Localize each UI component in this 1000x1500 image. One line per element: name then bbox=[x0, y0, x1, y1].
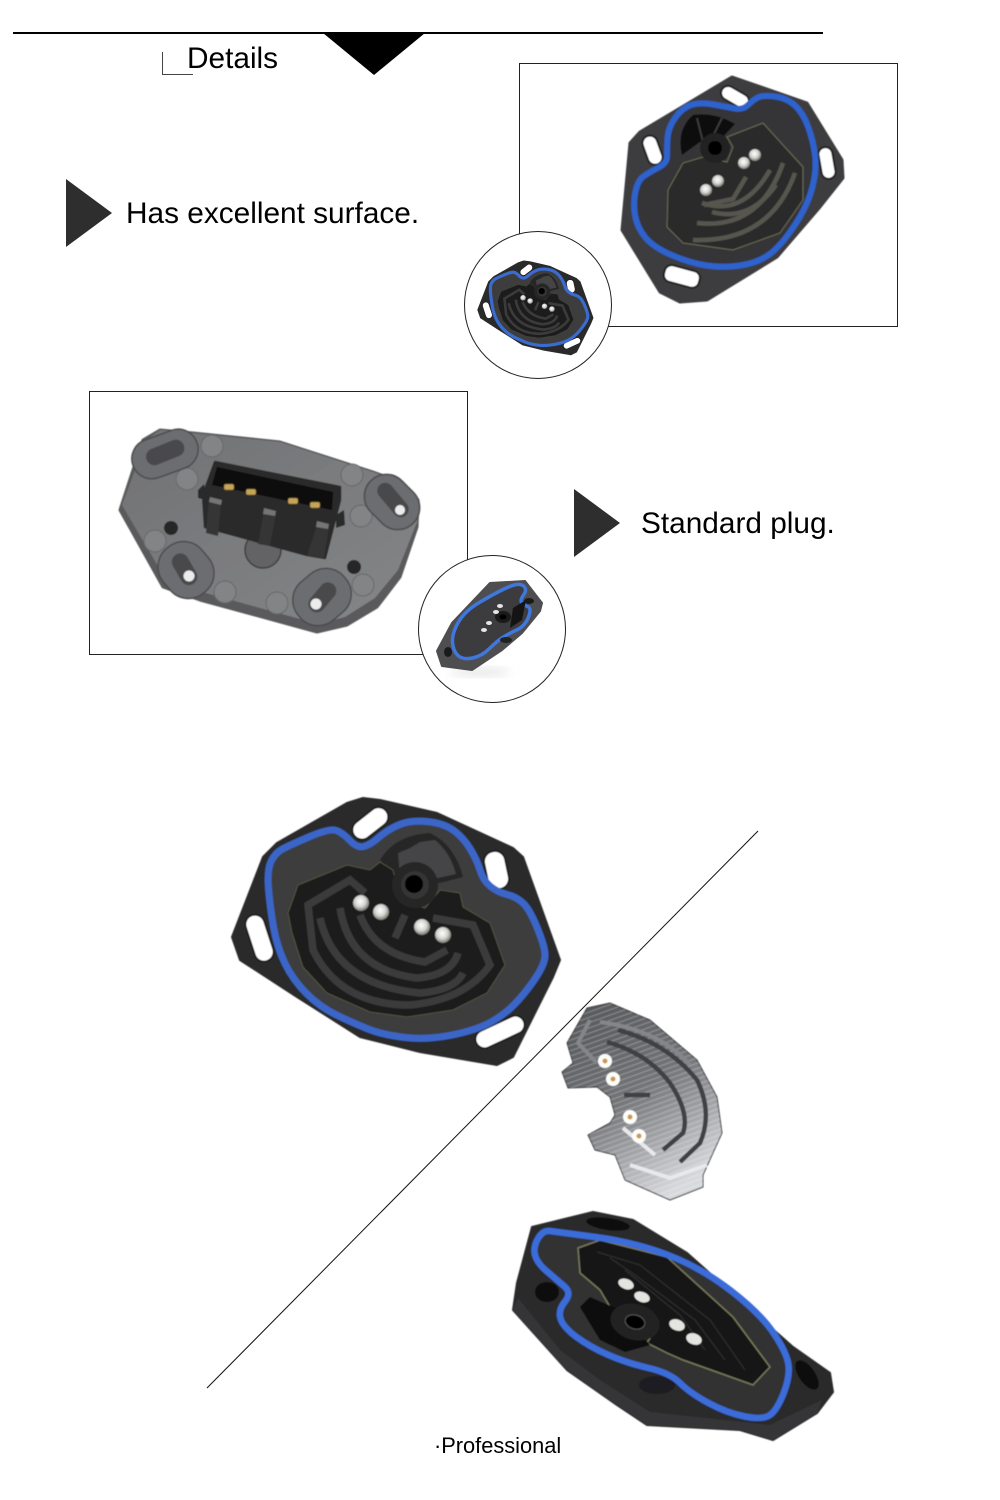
sensor photo: large face view bbox=[232, 798, 560, 1065]
inset circle: plug closeup bbox=[418, 556, 566, 702]
panel: plug photo frame bbox=[90, 392, 468, 654]
caption: Professional: ·Professional bbox=[434, 1433, 561, 1458]
sensor photo: plug side bbox=[120, 424, 429, 635]
panel: surface photo frame bbox=[520, 64, 898, 326]
arrow: surface feature bbox=[66, 179, 112, 247]
text: plug feature: Standard plug. bbox=[641, 507, 835, 540]
diagonal divider bbox=[207, 831, 758, 1388]
text: surface feature: Has excellent surface. bbox=[126, 197, 419, 230]
header triangle marker bbox=[323, 33, 425, 75]
arrow: plug feature bbox=[574, 489, 620, 557]
sensor photo: surface side bbox=[622, 77, 843, 302]
circuit board photo bbox=[562, 1003, 722, 1200]
inset circle: surface closeup bbox=[464, 232, 612, 378]
header rule bbox=[13, 32, 823, 34]
heading: Details: Details bbox=[187, 42, 278, 75]
sensor photo: angled view bbox=[513, 1212, 833, 1440]
